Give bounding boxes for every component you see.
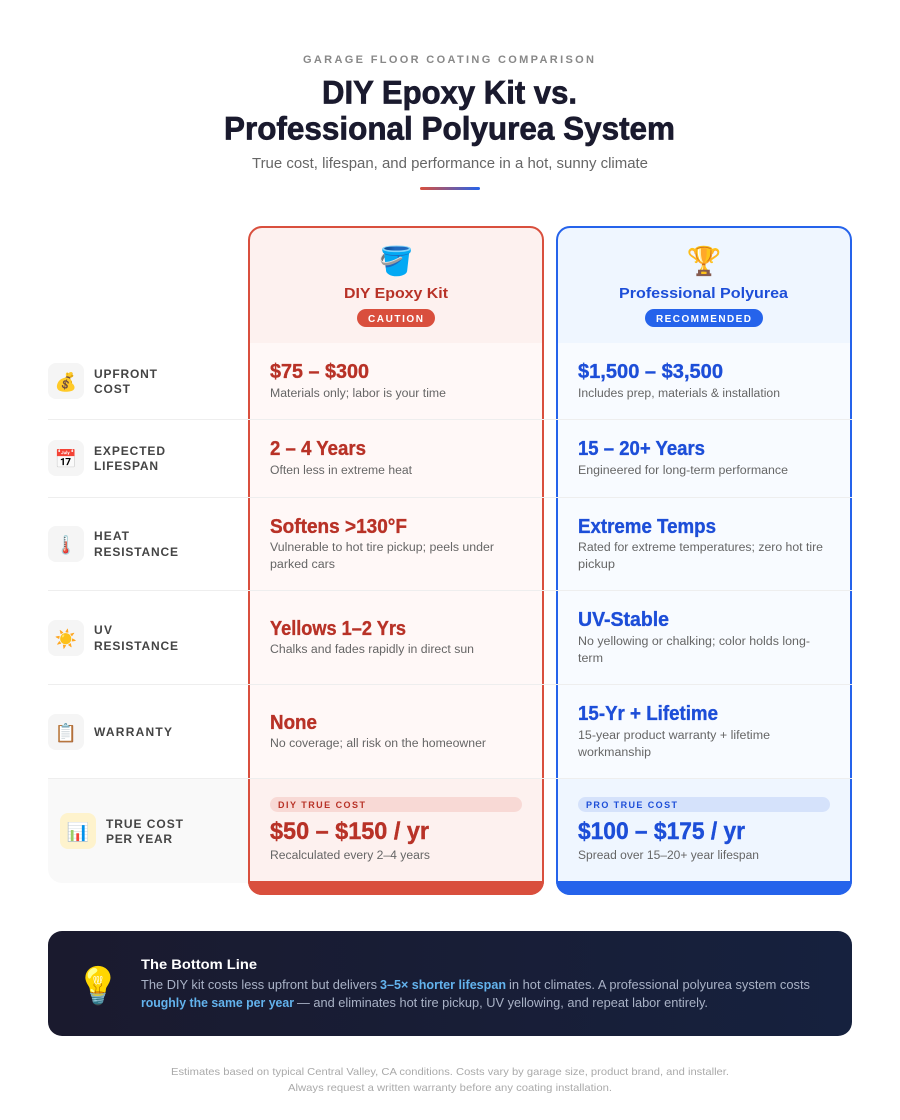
Pro true cost [578,797,830,862]
panel: true cost row label background [48,779,248,883]
row: true cost per year [60,797,830,862]
label: expected lifespan: LIFESPAN [94,459,158,473]
panel: Professional Polyurea column [556,226,852,895]
DIY heat: parked cars [270,559,335,571]
label: true cost per year [106,817,184,846]
icon: thermometer: 🌡️ [55,534,77,556]
footnote: Always request a written warranty before any coating installation. [288,1082,612,1094]
title [224,74,675,146]
DIY lifespan: Often less in extreme heat [270,465,413,477]
label: heat resistance [94,529,178,559]
eyebrow: GARAGE FLOOR COATING COMPARISON [303,54,594,66]
row: warranty [48,703,770,759]
title: DIY Epoxy Kit vs. [322,74,577,110]
callout body: — and eliminates hot tire pickup, UV yellowing, and repeat labor entirely. [297,996,708,1010]
Pro upfront cost [578,361,780,400]
Pro warranty [577,703,770,759]
badge: recommended [645,309,763,327]
DIY UV: Yellows 1–2 Yrs [270,618,406,640]
label: heat resistance: HEAT [94,529,130,543]
DIY heat: Softens >130°F [270,516,407,538]
Pro lifespan: 15 – 20+ Years [578,438,705,460]
badge: recommended: RECOMMENDED [656,314,751,325]
DIY true cost [270,797,522,862]
callout body: roughly the same per year [141,996,294,1010]
badge: caution: CAUTION [368,314,423,325]
row: upfront cost [48,361,780,400]
icon: calendar: 📅 [55,448,77,470]
panel: DIY Epoxy Kit column [248,226,544,895]
row: expected lifespan [48,438,788,477]
label: UV resistance: UV [94,623,112,637]
Pro warranty: workmanship [577,747,651,759]
icon: bar chart [60,813,96,849]
Pro heat: pickup [578,559,615,571]
footnote [171,1066,729,1094]
Pro UV [578,609,810,665]
callout body: in hot climates. A professional polyurea system costs [509,978,810,992]
callout: the bottom line [48,931,852,1036]
label: expected lifespan [94,444,165,473]
divider accent [420,187,480,190]
Pro true cost: Spread over 15–20+ year lifespan [578,850,759,862]
icon: light bulb: 💡 [76,965,120,1007]
subtitle: True cost, lifespan, and performance in a hot, sunny climate [252,155,648,172]
DIY true cost: DIY TRUE COST [278,800,366,810]
column title: Pro: Professional Polyurea [619,285,789,302]
column title: DIY: DIY Epoxy Kit [344,285,448,302]
row: UV resistance [48,609,810,665]
icon: thermometer [48,526,84,562]
callout heading: The Bottom Line [141,956,257,972]
DIY UV [270,618,474,656]
DIY upfront cost: $75 – $300 [270,361,369,383]
Pro upfront cost: Includes prep, materials & installation [578,388,780,400]
DIY lifespan [270,438,413,477]
icon: bucket: 🪣 [379,244,413,278]
footnote: Estimates based on typical Central Valley, CA conditions. Costs vary by garage size, product brand, and installer. [171,1066,729,1078]
icon: money bag [48,363,84,399]
DIY warranty [270,712,486,750]
Pro UV: No yellowing or chalking; color holds long- [578,636,810,648]
Pro true cost: $100 – $175 / yr [578,818,745,845]
label: UV resistance: RESISTANCE [94,639,178,653]
Pro heat: Rated for extreme temperatures; zero hot tire [578,542,823,554]
Pro UV: term [578,653,603,665]
DIY true cost: $50 – $150 / yr [270,818,429,845]
icon: clipboard [48,714,84,750]
icon: calendar [48,440,84,476]
DIY upfront cost: Materials only; labor is your time [270,388,446,400]
label: heat resistance: RESISTANCE [94,545,178,559]
DIY heat [270,516,494,571]
Pro true cost: PRO TRUE COST [586,800,678,810]
icon: sun: ☀️ [55,628,77,650]
callout body: The DIY kit costs less upfront but delivers [141,978,377,992]
label: upfront cost: UPFRONT [94,367,158,381]
icon: trophy: 🏆 [687,244,722,278]
DIY UV: Chalks and fades rapidly in direct sun [270,644,474,656]
callout body [141,978,810,1010]
icon: bar chart: 📊 [67,821,89,843]
Pro heat [578,516,823,571]
label: UV resistance [94,623,178,653]
DIY upfront cost [270,361,446,400]
DIY warranty: No coverage; all risk on the homeowner [270,738,486,750]
label: expected lifespan: EXPECTED [94,444,165,458]
Pro UV: UV-Stable [578,609,669,631]
DIY warranty: None [270,712,317,734]
Pro warranty: 15-Yr + Lifetime [578,703,718,725]
DIY lifespan: 2 – 4 Years [270,438,366,460]
Pro upfront cost: $1,500 – $3,500 [578,361,723,383]
title: Professional Polyurea System [224,110,675,146]
Pro warranty: 15-year product warranty + lifetime [578,730,770,742]
label: warranty: WARRANTY [94,725,172,739]
label: true cost per year: TRUE COST [106,817,184,831]
Pro heat: Extreme Temps [578,516,716,538]
label: true cost per year: PER YEAR [106,832,172,846]
label: upfront cost [94,367,158,396]
Pro lifespan [578,438,788,477]
icon: clipboard: 📋 [55,722,77,744]
callout body: 3–5× shorter lifespan [380,978,506,992]
Pro lifespan: Engineered for long-term performance [578,465,788,477]
DIY true cost: Recalculated every 2–4 years [270,850,430,862]
DIY heat: Vulnerable to hot tire pickup; peels under [270,542,494,554]
icon: sun [48,620,84,656]
column header: Professional Polyurea [619,244,789,327]
label: upfront cost: COST [94,382,131,396]
row: heat resistance [48,516,823,571]
icon: money bag: 💰 [55,371,77,393]
header [224,54,675,190]
column header: DIY Epoxy Kit [344,244,448,327]
